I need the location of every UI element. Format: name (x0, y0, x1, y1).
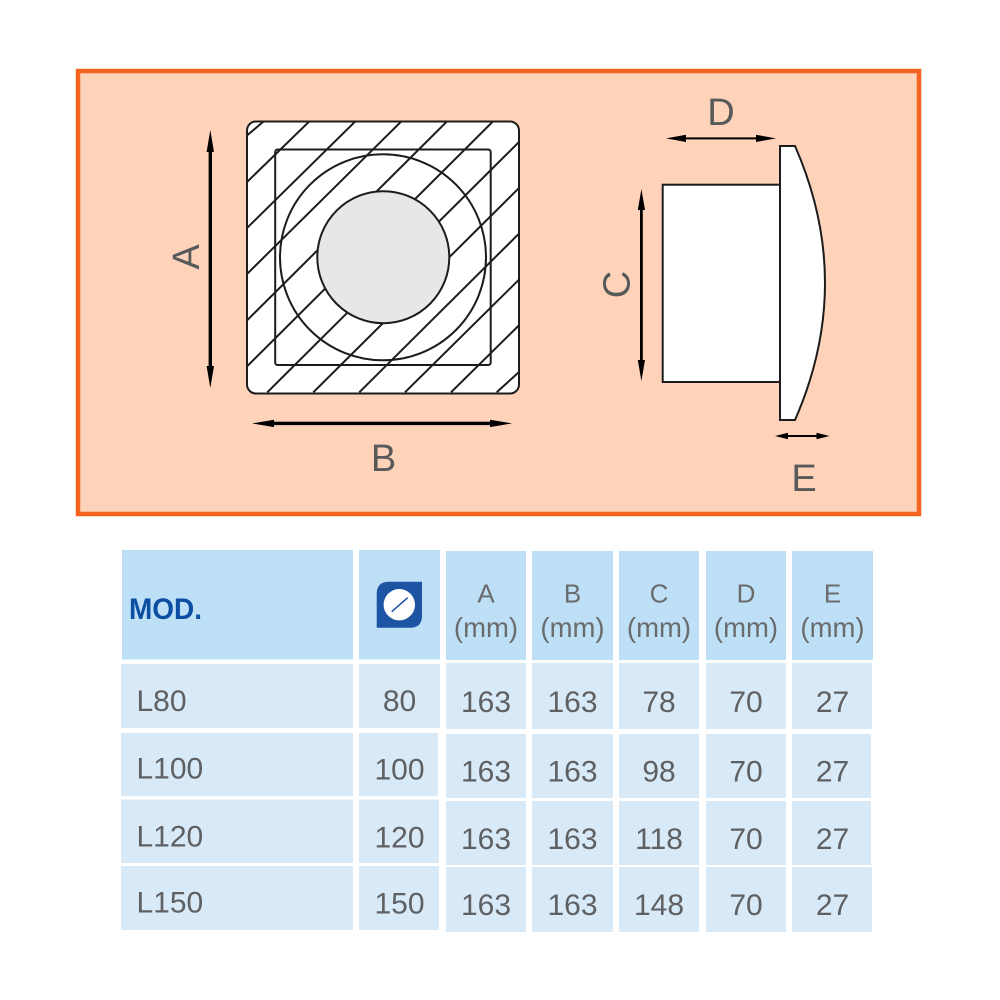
header: C: C (650, 578, 668, 608)
label: B: B (371, 438, 396, 480)
header: B: B (564, 578, 581, 608)
row: L150: 70 (729, 889, 763, 922)
table header row (122, 550, 873, 660)
header: MOD. (122, 550, 353, 660)
header: diameter icon (359, 550, 440, 660)
arrow: dimension B (252, 420, 512, 427)
row: L100: L100 (136, 752, 203, 786)
row: L100: 100 (374, 754, 425, 786)
row: L150: 27 (816, 889, 849, 922)
label: C: C (596, 271, 638, 298)
row: L150: 150 (374, 888, 425, 920)
header: A: A (477, 578, 495, 608)
side view of fan (663, 146, 825, 420)
row: L150: 148 (634, 889, 684, 922)
header: E (792, 551, 873, 660)
row: L120: 118 (635, 823, 683, 856)
header: MOD.: MOD. (129, 593, 202, 626)
header: E: E (824, 578, 841, 608)
header: C (619, 551, 699, 660)
panel: technical drawing (78, 71, 919, 514)
table (121, 550, 873, 932)
row: L80 (121, 663, 872, 729)
label: A: A (166, 244, 208, 270)
row: L100: 163 (547, 756, 598, 788)
row: L150: 163 (461, 889, 511, 922)
row: L120: 163 (461, 823, 511, 856)
header: A: (mm) (454, 612, 518, 643)
row: L150: 163 (547, 889, 598, 922)
row: L100 (121, 733, 871, 798)
arrow: dimension E (775, 433, 830, 439)
row: L150 (121, 866, 872, 932)
header: B (532, 551, 613, 660)
row: L100: 70 (729, 756, 763, 788)
row: L120: L120 (136, 820, 203, 854)
row: L80: 70 (729, 686, 763, 719)
row: L120 (121, 800, 871, 865)
header: D: (mm) (714, 612, 778, 643)
row: L120: 70 (729, 823, 763, 856)
row: L80: 78 (642, 686, 676, 719)
row: L80: 80 (383, 685, 416, 718)
row: L120: 120 (374, 822, 425, 854)
row: L150: L150 (136, 886, 203, 920)
label: E: E (791, 458, 817, 500)
row: L80: 163 (461, 686, 511, 719)
row: L100: 98 (642, 756, 676, 788)
row: L80: L80 (136, 685, 187, 718)
header: D (706, 551, 786, 660)
row: L100: 27 (816, 756, 849, 788)
header: B: (mm) (540, 612, 605, 643)
row: L80: 27 (816, 686, 849, 719)
header: A (446, 551, 526, 660)
label: D: D (707, 92, 735, 134)
arrow: dimension D (666, 135, 776, 142)
row: L120: 163 (547, 823, 598, 856)
row: L120: 27 (816, 823, 849, 856)
row: L100: 163 (461, 756, 511, 788)
header: E: (mm) (800, 612, 865, 643)
row: L80: 163 (547, 686, 598, 719)
header: C: (mm) (627, 612, 691, 643)
header: D: D (737, 578, 755, 608)
front view of fan (247, 122, 519, 394)
arrow: dimension A (207, 130, 214, 388)
arrow: dimension C (638, 189, 645, 381)
